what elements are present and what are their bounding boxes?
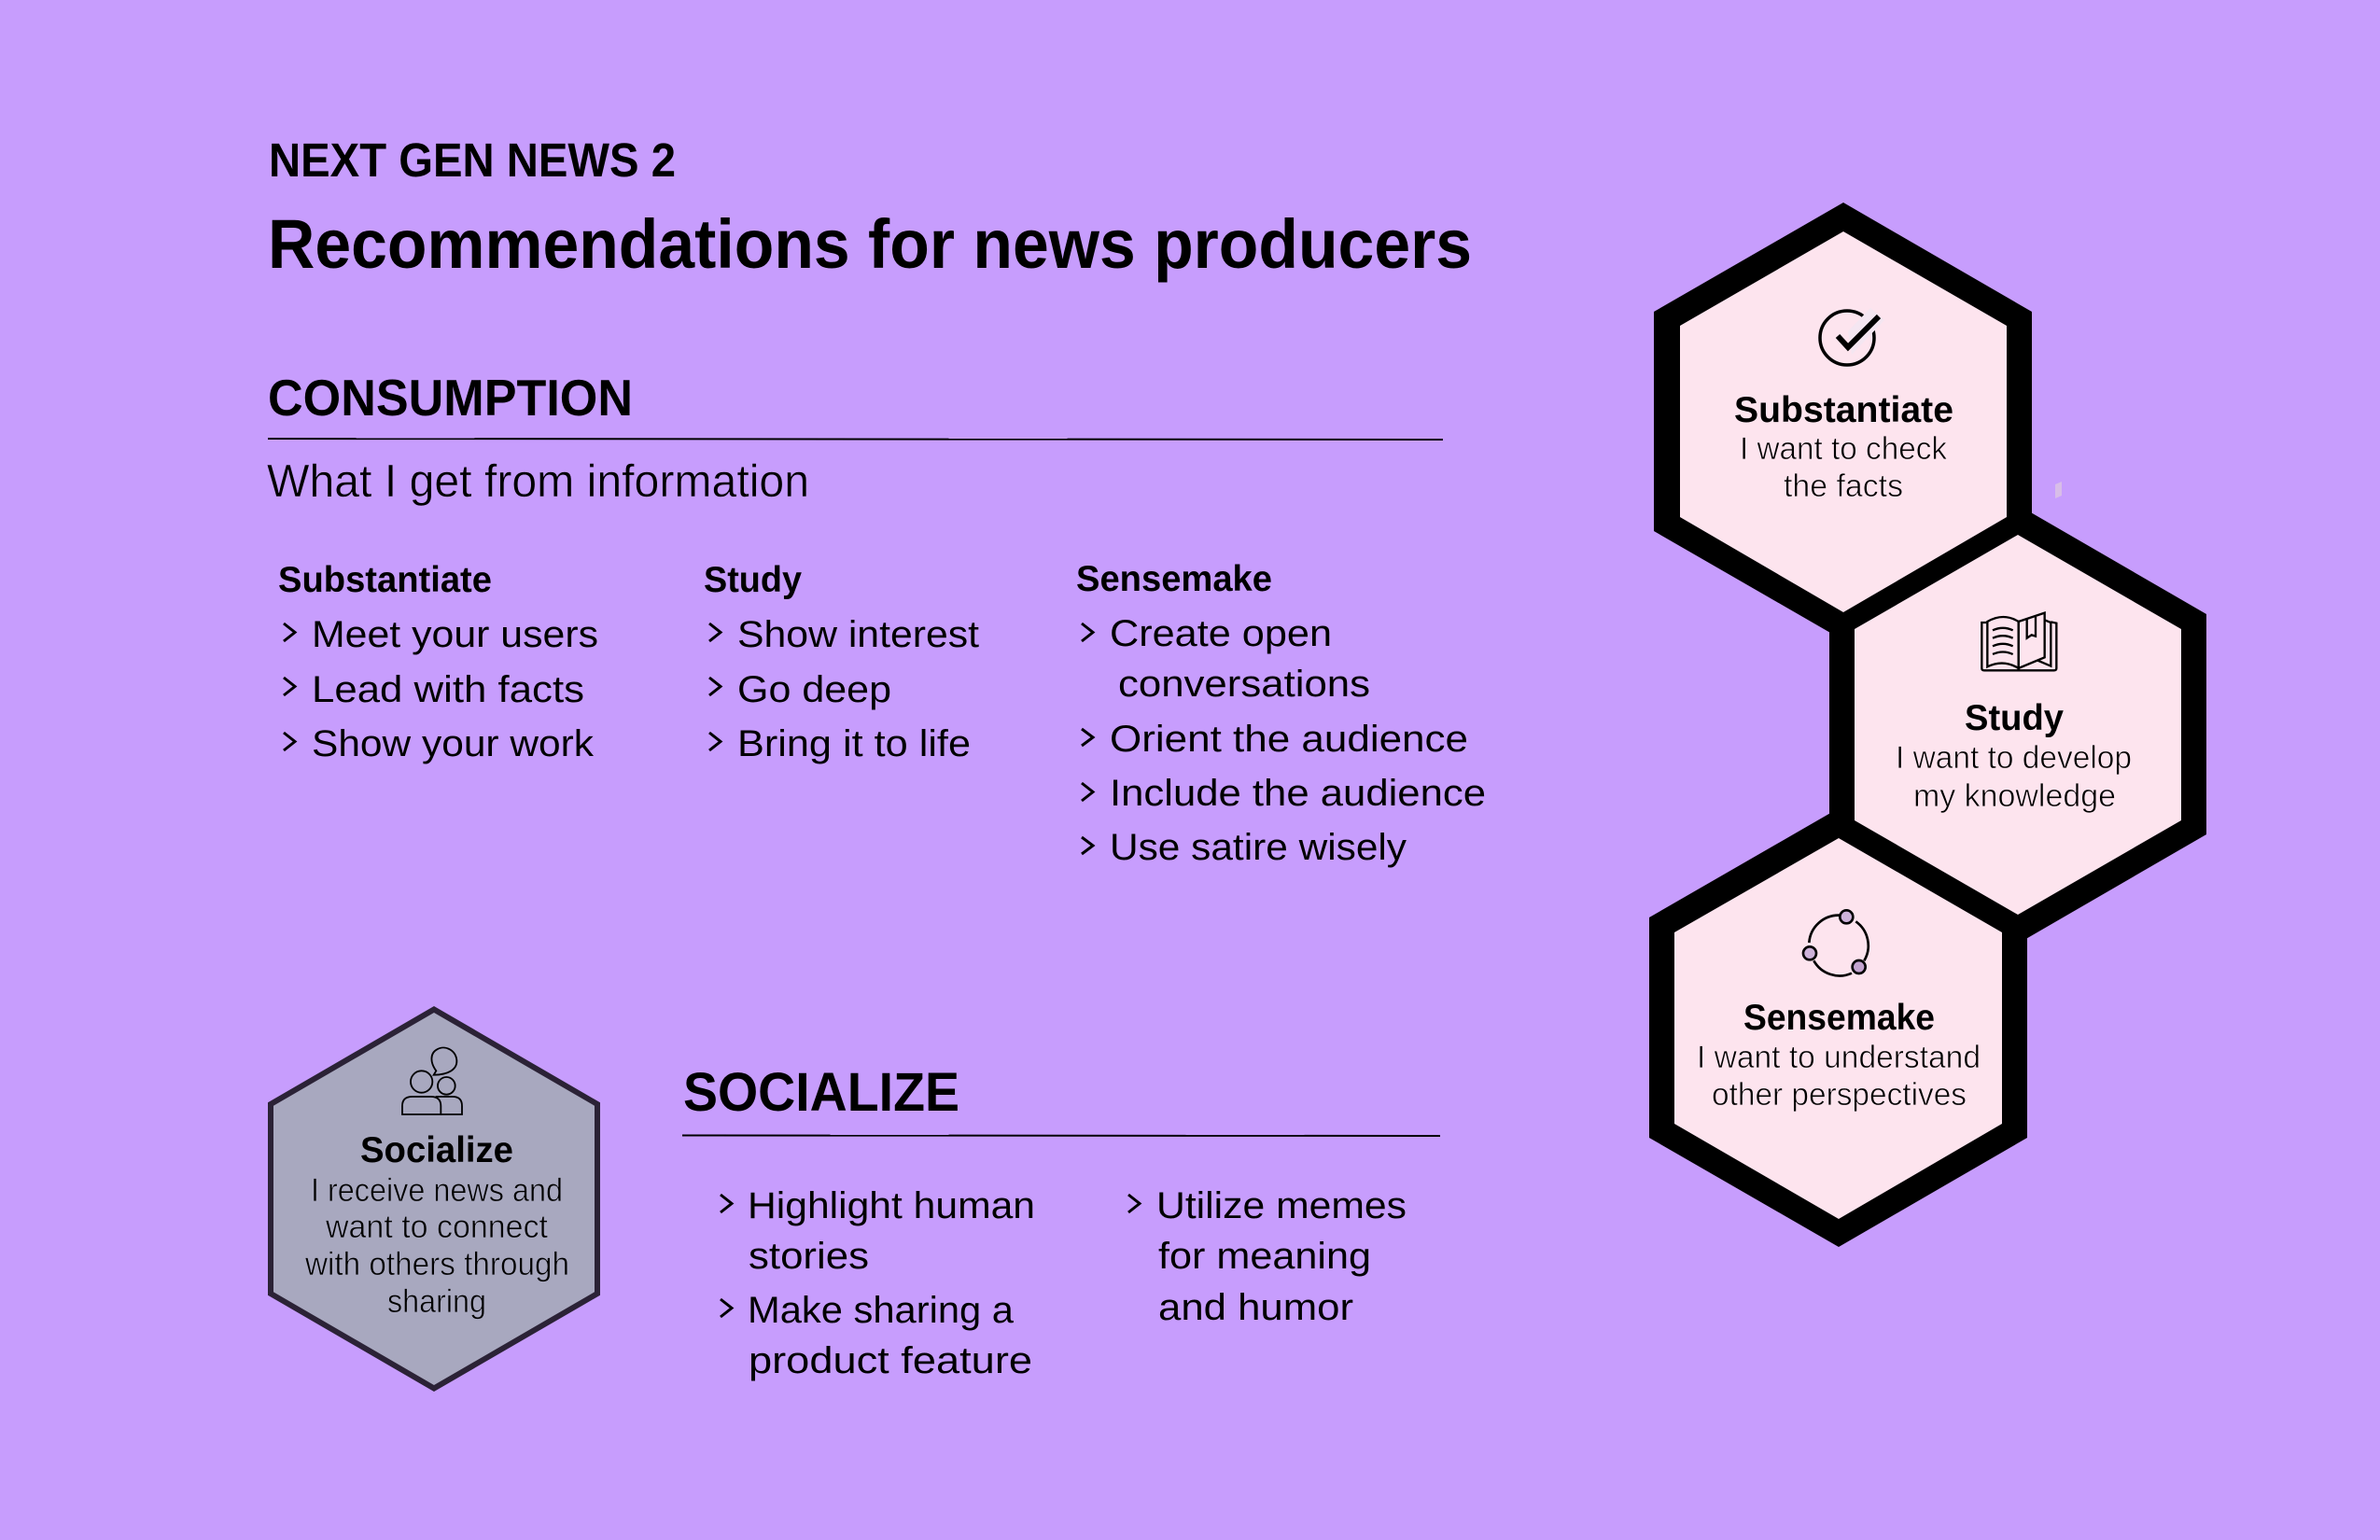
icon: check mark in circle [1820, 308, 1884, 365]
column: Sensemake list [1076, 559, 1486, 868]
hexagon heading: Substantiate: Substantiate [1734, 390, 1953, 430]
hexagon description: Socialize: sharing [387, 1283, 486, 1320]
list item: Lead with facts: Lead with facts [312, 669, 584, 710]
list item: Utilize memes for meaning and humor: and humor [1158, 1287, 1353, 1328]
list item: Utilize memes for meaning and humor: for meaning [1158, 1236, 1371, 1277]
icon: open book [1981, 613, 2056, 670]
title: Recommendations for news producers [268, 205, 1472, 283]
list item: Highlight human stories: stories [749, 1236, 869, 1277]
hexagon description: Sensemake [1697, 1040, 1981, 1113]
heading: CONSUMPTION: CONSUMPTION [268, 369, 633, 427]
list item: Meet your users: Meet your users [312, 614, 598, 655]
column: Substantiate list [278, 560, 598, 764]
panel: Socialize hexagon [271, 1010, 597, 1389]
list item: Create open conversations: Create open [1110, 613, 1332, 654]
panel: Substantiate hexagon [1680, 231, 2007, 612]
heading: SOCIALIZE: SOCIALIZE [683, 1062, 959, 1123]
list item: Make sharing a product feature: Make sharing a [748, 1290, 1015, 1331]
hexagon description: Sensemake: I want to understand [1697, 1040, 1981, 1075]
hexagon description: Study [1896, 740, 2132, 814]
eyebrow: NEXT GEN NEWS 2: NEXT GEN NEWS 2 [269, 133, 676, 187]
hexagon heading: Socialize: Socialize [360, 1130, 513, 1170]
hexagon description: Socialize: with others through [304, 1246, 569, 1282]
list item: Show interest: Show interest [737, 614, 979, 655]
icon: cycle of three nodes [1803, 910, 1869, 975]
hexagon description: Substantiate: I want to check [1740, 431, 1948, 467]
list item: Orient the audience: Orient the audience [1110, 719, 1468, 760]
column heading: Substantiate: Substantiate [278, 560, 492, 600]
hexagon description: Study: I want to develop [1896, 740, 2132, 776]
list item: Create open conversations: conversations [1118, 664, 1370, 705]
icon: people with speech bubble [402, 1047, 462, 1114]
hexagon description: Study: my knowledge [1913, 778, 2116, 814]
list item: Utilize memes for meaning and humor: Utilize memes [1156, 1185, 1407, 1226]
list item: Utilize memes for meaning and humor [1128, 1185, 1407, 1328]
column heading: Study: Study [704, 560, 802, 600]
hexagon description: Sensemake: other perspectives [1712, 1077, 1967, 1113]
list: Socialize recommendations, column 1 [721, 1185, 1035, 1381]
list item: Highlight human stories: Highlight human [748, 1185, 1035, 1226]
list item: Highlight human stories [721, 1185, 1035, 1277]
panel: Study hexagon [1855, 535, 2181, 915]
hexagon description: Socialize [304, 1172, 569, 1320]
list item: Create open conversations [1082, 613, 1370, 705]
hexagon description: Socialize: I receive news and [311, 1172, 563, 1209]
list item: Bring it to life: Bring it to life [737, 723, 971, 764]
hexagon description: Substantiate: the facts [1784, 469, 1903, 504]
list item: Include the audience: Include the audience [1110, 773, 1486, 814]
list item: Make sharing a product feature: product feature [749, 1340, 1032, 1381]
list item: Go deep: Go deep [737, 669, 891, 710]
panel: Sensemake hexagon [1674, 838, 2002, 1219]
hexagon heading: Study: Study [1965, 698, 2064, 738]
hexagon cluster outlines [1649, 203, 2206, 1247]
subheading: what I get from information: What I get from information [267, 456, 809, 507]
hexagon description: Substantiate [1740, 431, 1948, 504]
column: Study list [704, 560, 979, 764]
list item: Use satire wisely: Use satire wisely [1110, 827, 1407, 868]
list item: Show your work: Show your work [312, 723, 595, 764]
column heading: Sensemake: Sensemake [1076, 559, 1272, 599]
list item: Make sharing a product feature [721, 1290, 1032, 1381]
hexagon description: Socialize: want to connect [325, 1209, 548, 1245]
hexagon heading: Sensemake: Sensemake [1743, 998, 1935, 1038]
